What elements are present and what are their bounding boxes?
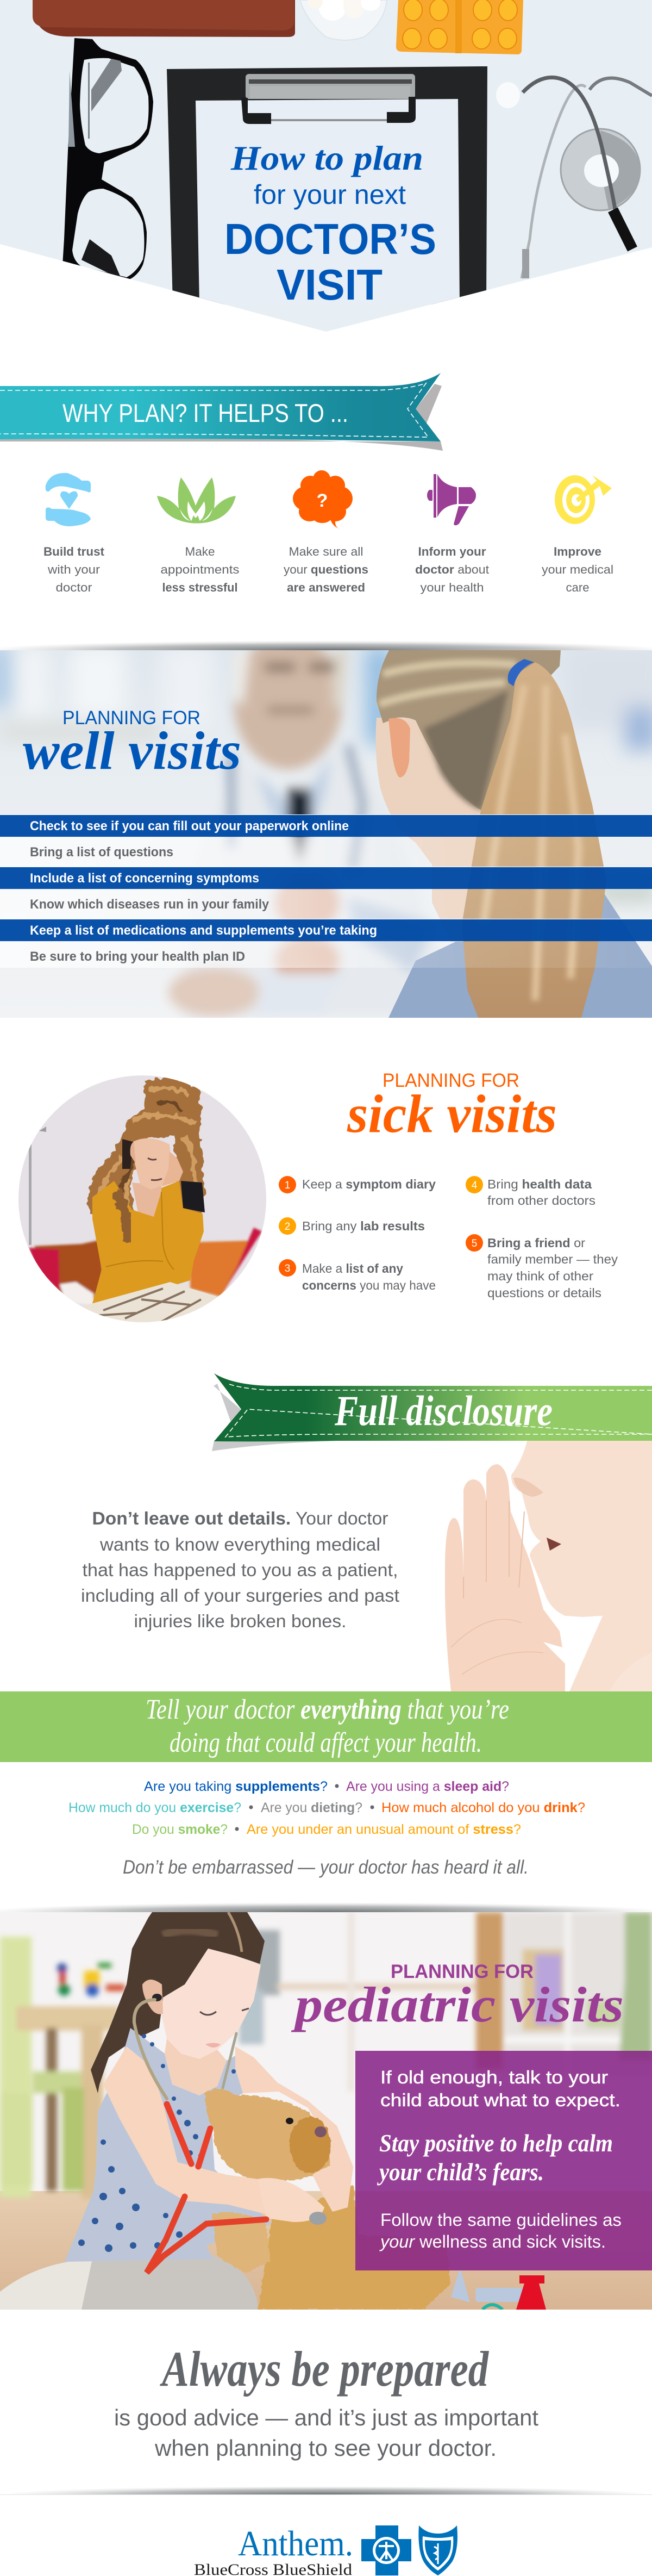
clipboard xyxy=(167,66,487,304)
closing heading: always be prepared: Always be prepared xyxy=(160,2341,490,2397)
question list: How much alcohol do you drink? xyxy=(381,1800,585,1815)
tips: your wellness and sick visits. xyxy=(379,2232,606,2251)
green band: tell your doctor everything xyxy=(0,1691,652,1762)
item 4: Bring health data xyxy=(487,1177,592,1191)
sofa xyxy=(29,1228,262,1305)
item 4 xyxy=(466,1176,595,1208)
icon: question cloud xyxy=(293,470,353,529)
hands xyxy=(258,2178,324,2222)
benefit: build trust: doctor xyxy=(55,581,92,594)
legs xyxy=(82,2251,258,2310)
question list: Are you taking supplements? xyxy=(144,1779,328,1794)
heading: pediatric visits xyxy=(291,1977,624,2032)
benefit: inform your doctor xyxy=(415,474,489,594)
purple box xyxy=(355,2051,652,2270)
tips xyxy=(377,2067,622,2251)
photo: sick woman in circle xyxy=(16,1074,269,1327)
tips: Stay positive to help calm xyxy=(379,2129,613,2157)
text block: don't leave out details: injuries like broken bones. xyxy=(134,1611,347,1631)
hand xyxy=(162,1152,183,1186)
heading: PLANNING FOR xyxy=(383,1070,519,1091)
neck xyxy=(132,1183,161,1218)
item 3 xyxy=(279,1259,436,1292)
ribbon: full disclosure xyxy=(212,1373,652,1451)
title: DOCTOR’S xyxy=(224,215,436,263)
item 5: 5 xyxy=(472,1238,477,1249)
item 4: 4 xyxy=(472,1180,478,1191)
benefit: improve care: your medical xyxy=(542,563,613,576)
icon: blue cross xyxy=(361,2525,411,2575)
logo: Anthem Blue Cross Blue Shield xyxy=(194,2524,457,2576)
bear xyxy=(205,2089,451,2310)
benefit: build trust: Build trust xyxy=(43,545,105,558)
ribbon: full disclosure: Full disclosure xyxy=(334,1387,553,1434)
checklist: Be sure to bring your health plan ID xyxy=(30,949,245,964)
ribbon: why plan xyxy=(0,373,443,451)
benefit: less stressful: less stressful xyxy=(162,581,238,594)
closing text: when planning to see your doctor. xyxy=(154,2435,497,2461)
pill blister pack xyxy=(396,0,523,54)
benefit: inform your doctor: your health xyxy=(421,581,484,594)
closing text xyxy=(114,2405,538,2461)
benefit: less stressful: appointments xyxy=(161,563,239,576)
face xyxy=(133,1138,172,1190)
green band: tell your doctor everything: Tell your doctor everything that you’re xyxy=(146,1694,509,1725)
scrunchie xyxy=(508,659,534,686)
benefit: inform your doctor: Inform your xyxy=(418,545,486,558)
item 2 xyxy=(279,1217,425,1235)
heading: PLANNING FOR xyxy=(391,1961,534,1982)
item 2: Bring any lab results xyxy=(302,1219,425,1233)
photo: doctor and patient xyxy=(0,633,652,1018)
tips: If old enough, talk to your xyxy=(380,2067,608,2087)
heading: sick visits xyxy=(347,1084,557,1144)
closing text: is good advice — and it’s just as important xyxy=(114,2405,538,2430)
title: for your next xyxy=(254,179,406,210)
face xyxy=(161,1949,261,2059)
item 1: Keep a symptom diary xyxy=(302,1177,436,1191)
benefit: improve care xyxy=(542,475,613,594)
question list: How much do you exercise? xyxy=(68,1800,241,1815)
sweater xyxy=(92,1181,204,1304)
title xyxy=(224,139,436,309)
item 3: concerns you may have xyxy=(302,1278,436,1292)
checklist: Bring a list of questions xyxy=(30,845,173,860)
icon: target with arrow xyxy=(555,475,612,524)
question list: Are you dieting? xyxy=(261,1800,362,1815)
text: don't be embarrassed: Don’t be embarrassed — your doctor has heard it all. xyxy=(123,1857,529,1878)
dress xyxy=(65,2028,272,2262)
photo: face and hand whispering xyxy=(445,1435,652,1691)
icon: question cloud: ? xyxy=(317,490,328,511)
tips: your child’s fears. xyxy=(377,2158,544,2186)
benefit: questions answered: your questions xyxy=(284,563,368,576)
doctor xyxy=(196,744,408,1014)
question list xyxy=(68,1779,585,1837)
item 3: Make a list of any xyxy=(302,1261,403,1275)
checklist: Include a list of concerning symptoms xyxy=(30,871,259,886)
heading xyxy=(291,1961,624,2032)
checklist: Keep a list of medications and supplements you’re taking xyxy=(30,923,377,938)
icon: hands and heart xyxy=(46,473,91,526)
benefit: questions answered: Make sure all xyxy=(289,545,363,558)
left arm xyxy=(103,2046,272,2216)
question list: Are you using a sleep aid? xyxy=(346,1779,509,1794)
question list: Do you smoke? xyxy=(132,1822,228,1837)
hair behind xyxy=(85,1079,204,1242)
item 2: 2 xyxy=(285,1221,290,1233)
item 3: 3 xyxy=(285,1263,290,1274)
ribbon: why plan: WHY PLAN? IT HELPS TO ... xyxy=(62,399,348,427)
text block: don't leave out details: that has happened to you as a patient, xyxy=(83,1560,398,1580)
item 5 xyxy=(466,1234,618,1300)
panel: pediatric visits xyxy=(0,1912,652,2311)
pill bowl xyxy=(300,0,387,40)
item 1: 1 xyxy=(285,1180,290,1191)
dark under-hair and black top xyxy=(122,1139,133,1169)
glasses xyxy=(61,38,153,283)
blanket xyxy=(83,1282,217,1327)
icon: megaphone xyxy=(427,474,476,525)
benefit: inform your doctor: doctor about xyxy=(415,563,489,576)
tips: child about what to expect. xyxy=(380,2090,620,2110)
text block: don't leave out details: including all of your surgeries and past xyxy=(81,1585,399,1606)
item 5: may think of other xyxy=(487,1269,593,1283)
sweater xyxy=(388,891,652,1018)
wallet xyxy=(33,0,295,37)
right arm xyxy=(235,2046,353,2207)
list bands xyxy=(0,814,652,968)
benefit: improve care: Improve xyxy=(554,545,601,558)
ear xyxy=(388,718,410,777)
checklist xyxy=(30,819,377,964)
checklist: Know which diseases run in your family xyxy=(30,897,269,912)
text block: don't leave out details xyxy=(81,1508,399,1631)
stethoscope xyxy=(134,2000,266,2273)
tips: Follow the same guidelines as xyxy=(380,2210,622,2230)
text block: don't leave out details: wants to know everything medical xyxy=(99,1534,380,1554)
benefit: less stressful xyxy=(157,477,239,594)
benefit: questions answered xyxy=(284,470,368,594)
logo: Anthem Blue Cross Blue Shield: Anthem. xyxy=(238,2524,353,2563)
photo: girl with teddy bear xyxy=(0,1912,652,2311)
heading: PLANNING FOR xyxy=(62,707,200,729)
title: VISIT xyxy=(277,260,383,309)
panel: well visits xyxy=(0,633,652,1018)
hair strands over sweater xyxy=(115,1191,128,1242)
hero photo: desk with clipboard xyxy=(0,0,652,337)
benefit: questions answered: are answered xyxy=(287,581,365,594)
text block: don't leave out details: Don’t leave out details. Your doctor xyxy=(92,1508,388,1528)
ear xyxy=(142,1980,163,2014)
icon: blue shield xyxy=(418,2525,457,2575)
title: How to plan xyxy=(230,139,423,177)
item 5: family member — they xyxy=(487,1252,618,1266)
heading: well visits xyxy=(23,720,241,781)
ponytail xyxy=(462,662,606,1018)
face and neck xyxy=(376,718,481,942)
question list: Are you under an unusual amount of stress? xyxy=(247,1822,521,1837)
head hair xyxy=(377,650,561,810)
hair xyxy=(91,1912,265,2093)
green band: tell your doctor everything: doing that could affect your health. xyxy=(170,1727,482,1758)
item 5: questions or details xyxy=(487,1286,601,1300)
item 1 xyxy=(279,1176,436,1193)
hands xyxy=(271,889,344,919)
toys xyxy=(451,2267,470,2303)
benefit: improve care: care xyxy=(566,581,589,594)
stethoscope xyxy=(496,77,652,278)
benefit: build trust xyxy=(43,473,105,594)
item 4: from other doctors xyxy=(487,1193,595,1208)
benefit: less stressful: Make xyxy=(185,545,215,558)
benefit: build trust: with your xyxy=(47,563,100,576)
metal clip xyxy=(241,74,416,124)
numbered list: sick visits xyxy=(279,1176,618,1300)
icon: lotus xyxy=(157,477,236,523)
checklist: Check to see if you can fill out your paperwork online xyxy=(30,819,349,833)
item 5: Bring a friend or xyxy=(487,1236,585,1250)
